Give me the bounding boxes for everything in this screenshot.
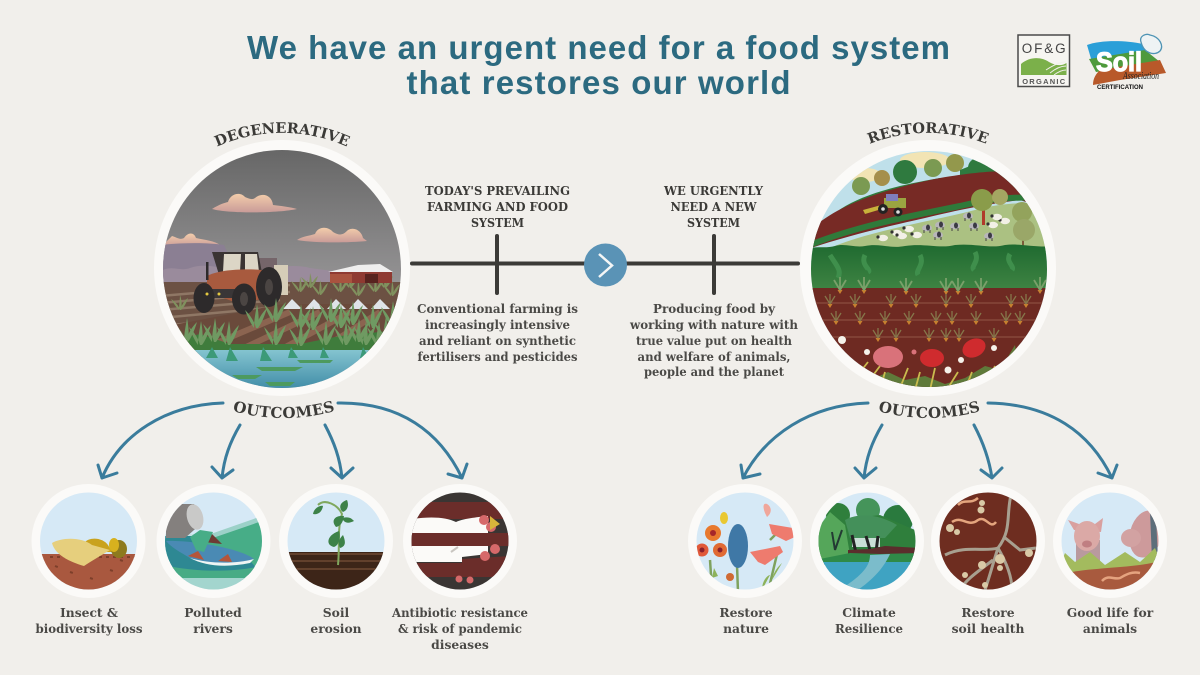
label: soil erosion: erosion	[310, 621, 362, 636]
crops	[184, 332, 384, 352]
text: conventional farming description: Conventional farming is	[417, 301, 578, 316]
orchard trees	[982, 210, 985, 225]
arrow: outcome 6	[855, 425, 882, 478]
label: restore soil health: soil health	[952, 621, 1024, 636]
timeline connector	[412, 236, 798, 293]
tractor	[863, 194, 906, 216]
field	[160, 282, 405, 357]
wild flower strip	[880, 345, 1016, 387]
label: climate resilience	[835, 605, 903, 636]
label: antibiotic resistance: diseases	[431, 637, 489, 652]
label: polluted rivers	[184, 605, 242, 636]
logo: OF&G organic	[1018, 35, 1070, 86]
heading: Degenerative: DEGENERATIVE	[214, 122, 350, 146]
icon: restore soil health	[931, 484, 1045, 598]
text: new system heading: WE URGENTLY	[663, 183, 764, 198]
water	[195, 350, 369, 388]
label: soil erosion: Soil	[323, 605, 350, 620]
logo: OF&G organic: ORGANIC	[1022, 77, 1066, 86]
arrow: outcome 5	[741, 403, 868, 478]
barn	[330, 272, 392, 283]
text: conventional farming description: and reliant on synthetic	[419, 333, 576, 348]
panel: degenerative farm illustration	[154, 140, 410, 396]
text: new system heading: NEED A NEW	[670, 199, 757, 214]
carrots row 4	[873, 328, 999, 342]
text: conventional farming description	[417, 301, 578, 364]
logo: Soil Association certification: Association	[1122, 71, 1159, 82]
logo: Soil Association certification: CERTIFICATION	[1097, 84, 1143, 91]
cloud: upper	[212, 194, 297, 212]
label: restore nature: Restore	[719, 605, 773, 620]
arrow: outcome 8	[988, 403, 1117, 478]
icon: good life for animals	[1053, 484, 1168, 598]
sheep and cows	[876, 212, 1010, 241]
text: conventional farming description: fertilisers and pesticides	[418, 349, 578, 364]
text: restorative description	[629, 301, 798, 379]
label: insect and biodiversity loss: Insect &	[60, 605, 118, 620]
label: restore nature	[719, 605, 773, 636]
heading: Restorative: RESTORATIVE	[866, 122, 990, 144]
title: that restores our world	[406, 64, 790, 101]
text: new system heading	[663, 183, 764, 230]
cloud: left	[165, 234, 220, 247]
distant hills	[163, 243, 227, 284]
icon: soil erosion	[279, 484, 393, 598]
label: soil erosion	[310, 605, 362, 636]
label: insect and biodiversity loss	[36, 605, 143, 636]
panel: restorative farm illustration	[800, 140, 1056, 396]
label: antibiotic resistance: Antibiotic resistance	[391, 605, 528, 620]
heading: outcomes right: OUTCOMES	[880, 401, 980, 418]
icon: restore nature	[688, 484, 802, 598]
green hedge band	[805, 245, 1055, 290]
heading: outcomes left: OUTCOMES	[234, 401, 334, 418]
text: today's system heading	[425, 183, 570, 230]
label: restore nature: nature	[723, 621, 769, 636]
label: good life for animals: animals	[1083, 621, 1137, 636]
text: today's system heading: TODAY'S PREVAILING	[425, 183, 570, 198]
text: today's system heading: SYSTEM	[471, 215, 524, 230]
tractor	[194, 252, 288, 314]
arrow: outcome 7	[974, 425, 1002, 478]
label: restore soil health	[952, 605, 1024, 636]
cloud: right	[297, 228, 367, 242]
label: good life for animals	[1067, 605, 1154, 636]
text: restorative description: people and the planet	[644, 364, 784, 379]
icon: antibiotic resistance	[403, 484, 517, 598]
icon: climate resilience	[810, 484, 924, 598]
icon: insect and biodiversity loss	[32, 484, 146, 598]
label: insect and biodiversity loss: biodiversity loss	[36, 621, 143, 636]
label: good life for animals: Good life for	[1067, 605, 1154, 620]
text: today's system heading: FARMING AND FOOD	[427, 199, 568, 214]
arrow: outcome 2	[212, 425, 240, 478]
label: climate resilience: Climate	[842, 605, 896, 620]
label: antibiotic resistance: & risk of pandemic	[398, 621, 522, 636]
label: restore soil health: Restore	[961, 605, 1015, 620]
arrow: outcome 3	[325, 425, 353, 478]
carrots row 2	[825, 294, 1031, 308]
logo: Soil Association certification: Soil	[1096, 47, 1142, 77]
text: new system heading: SYSTEM	[687, 215, 740, 230]
arrow: outcome 4	[338, 403, 467, 478]
ploughed hillside	[813, 172, 1026, 248]
label: antibiotic resistance	[391, 605, 528, 652]
text: conventional farming description: increasingly intensive	[425, 317, 570, 332]
logo: Soil Association certification	[1087, 34, 1166, 91]
fertiliser piles	[283, 299, 390, 309]
label: climate resilience: Resilience	[835, 621, 903, 636]
trees on skyline	[812, 154, 1030, 240]
label: polluted rivers: Polluted	[184, 605, 242, 620]
arrow: outcome 1	[98, 403, 223, 478]
icon: polluted rivers	[156, 484, 270, 598]
logo: OF&G organic: OF&G	[1022, 41, 1066, 56]
text: restorative description: working with nature with	[629, 317, 798, 332]
text: restorative description: true value put on health	[636, 333, 792, 348]
carrots row 3	[831, 311, 1025, 325]
carrots row 1	[834, 277, 1046, 295]
title: We have an urgent need for a food system	[247, 29, 950, 66]
icon: chevron button	[584, 244, 627, 286]
text: restorative description: Producing food by	[653, 301, 776, 316]
text: restorative description: and welfare of animals,	[638, 349, 790, 364]
title	[247, 29, 950, 101]
label: polluted rivers: rivers	[193, 621, 233, 636]
soil	[812, 288, 1046, 387]
